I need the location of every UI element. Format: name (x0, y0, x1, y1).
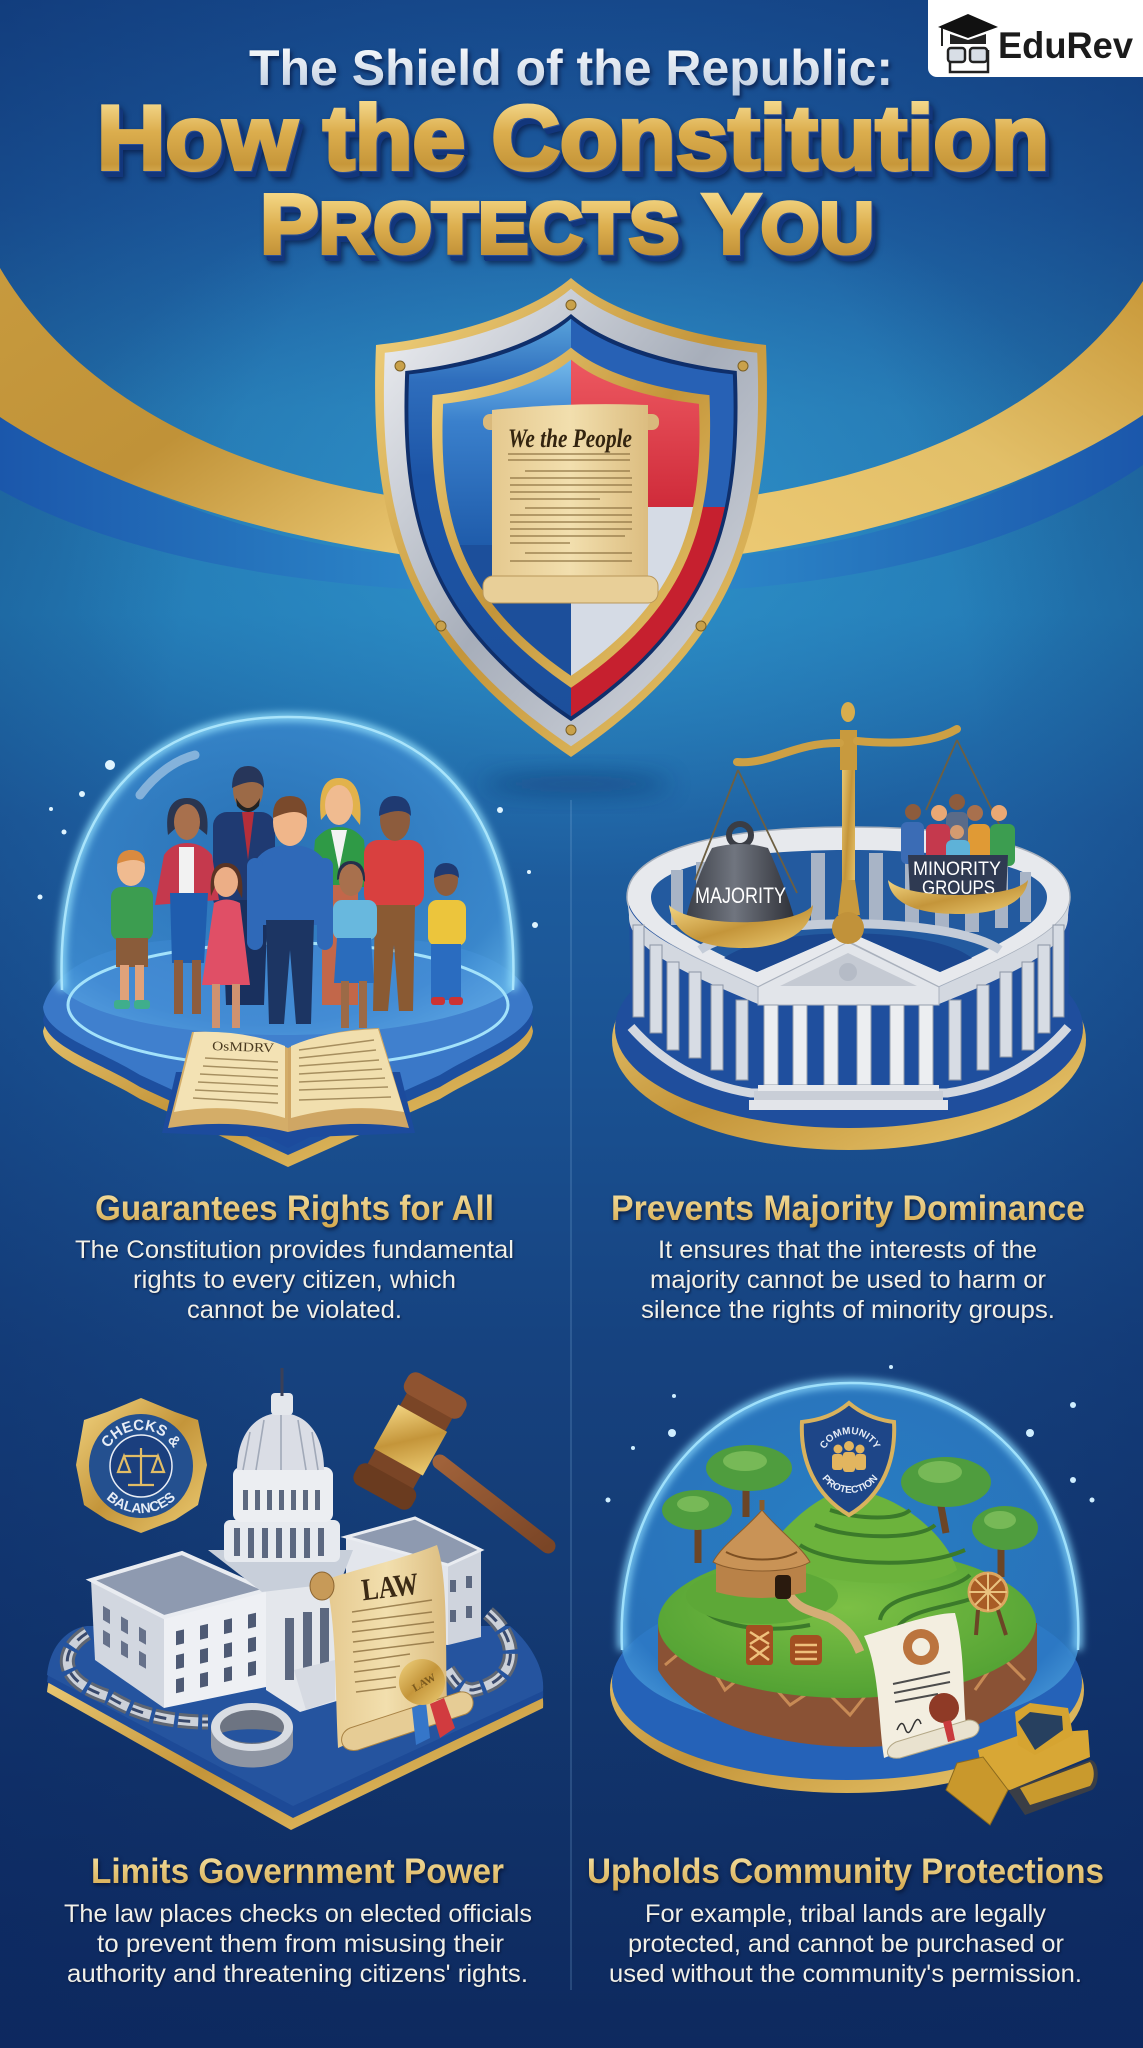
body text: majority cannot be used to harm or (650, 1266, 1046, 1294)
shield badge: community protection (800, 1400, 896, 1518)
icon: people (832, 1441, 866, 1472)
body text: protected, and cannot be purchased or (628, 1930, 1064, 1958)
panel: prevents majority dominance (611, 702, 1086, 1324)
terraced hill (686, 1490, 990, 1635)
body text: cannot be violated. (187, 1296, 402, 1324)
illustration: island (658, 1490, 1037, 1747)
illustration: platform (610, 1584, 1084, 1793)
illustration: hut (713, 1500, 810, 1599)
icons: tribal motifs (746, 1573, 1007, 1665)
right wing (346, 1518, 481, 1645)
logo: EduRev (928, 0, 1143, 77)
seal (399, 1659, 445, 1705)
illustration: glass dome (606, 1365, 1094, 1732)
body text: silence the rights of minority groups. (641, 1296, 1055, 1324)
illustration: open book (162, 1028, 415, 1148)
illustration: family group (111, 766, 466, 1028)
scroll: We the People (483, 404, 659, 603)
weight: majority (684, 824, 796, 935)
shield emblem (370, 278, 771, 794)
certificate (864, 1613, 979, 1758)
footpath (790, 1596, 860, 1652)
heading: Prevents Majority Dominance (611, 1189, 1085, 1228)
badge: checks and balances: CHECKS & (102, 1420, 180, 1448)
scroll: We the People: We the People (508, 424, 632, 453)
illustration: chains (67, 1613, 510, 1722)
icon: small scale (118, 1448, 164, 1485)
weight: majority: MAJORITY (695, 883, 786, 908)
figure: boy in green (111, 850, 153, 1009)
body text: It ensures that the interests of the (658, 1236, 1037, 1264)
illustration: platform (47, 1626, 543, 1830)
illustration: colonnade ring top (627, 827, 1070, 987)
body text: The law places checks on elected officials (64, 1900, 532, 1928)
illustration: capitol building (91, 1368, 481, 1712)
panel: limits government power (47, 1368, 556, 1989)
illustration: portico (749, 942, 948, 1110)
body text (64, 1900, 532, 1988)
figure: man in blue (247, 796, 333, 1024)
badge: checks and balances: BALANCES (106, 1492, 175, 1514)
icon: graduation cap and glasses (938, 14, 998, 72)
body text: For example, tribal lands are legally (645, 1900, 1046, 1928)
body text: to prevent them from misusing their (97, 1930, 504, 1958)
body text (75, 1236, 514, 1324)
logo: EduRev: EduRev (998, 25, 1133, 66)
heading: Upholds Community Protections (587, 1852, 1104, 1891)
shield quarters (440, 355, 706, 687)
shield rivets (395, 300, 748, 735)
figure: boy in yellow (428, 863, 466, 1005)
illustration: platform (612, 928, 1086, 1150)
body text: authority and threatening citizens' rights. (67, 1960, 528, 1988)
heading: Guarantees Rights for All (95, 1189, 494, 1228)
figure: man in suit (213, 766, 275, 1005)
figure: girl in light blue (333, 861, 377, 1028)
shield badge: community protection: COMMUNITY (820, 1426, 881, 1448)
illustration: glass dome (38, 717, 538, 1067)
main title line 2: PROTECTS YOU (260, 177, 874, 271)
seal: LAW (410, 1672, 438, 1694)
body text: The Constitution provides fundamental (75, 1236, 514, 1264)
illustration: platform (43, 940, 533, 1167)
badge: checks and balances (76, 1398, 207, 1533)
main title line 1: How the Constitution (97, 88, 1049, 189)
icon: gavel (350, 1369, 548, 1546)
icon: bulldozer (946, 1703, 1098, 1825)
figure: man in red (364, 796, 424, 1011)
illustration: trees (662, 1445, 1038, 1577)
minority figures (901, 794, 1015, 866)
illustration: ring interior (651, 850, 1047, 972)
decorative gold and blue ribbon arcs (0, 268, 1143, 590)
icon: balance scale (669, 702, 1028, 948)
body text: rights to every citizen, which (133, 1266, 456, 1294)
shield coloured rim (408, 318, 734, 716)
label: minority groups: GROUPS (922, 878, 995, 899)
body text: used without the community's permission. (609, 1960, 1082, 1988)
figure: woman in red (155, 798, 219, 1014)
panel divider (570, 800, 572, 1990)
body text (641, 1236, 1055, 1324)
icon: handcuff (211, 1703, 293, 1768)
label: minority groups: MINORITY (913, 859, 1001, 880)
left wing (91, 1553, 266, 1708)
body text (609, 1900, 1082, 1988)
panel: guarantees rights (38, 717, 538, 1324)
figure: blonde woman (311, 778, 368, 1005)
central portico (266, 1580, 340, 1712)
panel: upholds community protections (587, 1365, 1106, 1989)
illustration: open book: OsMDRV (212, 1038, 275, 1055)
shield badge: community protection: PROTECTION (822, 1474, 878, 1493)
capitol dome (208, 1368, 353, 1592)
scroll: law (310, 1545, 473, 1751)
scroll: law: LAW (360, 1566, 420, 1607)
figure: girl in pink (202, 863, 250, 1028)
label: minority groups (908, 855, 1008, 899)
pretitle: The Shield of the Republic: (249, 40, 893, 96)
illustration: colonnade front wall (627, 897, 1070, 1093)
heading: Limits Government Power (91, 1852, 504, 1891)
